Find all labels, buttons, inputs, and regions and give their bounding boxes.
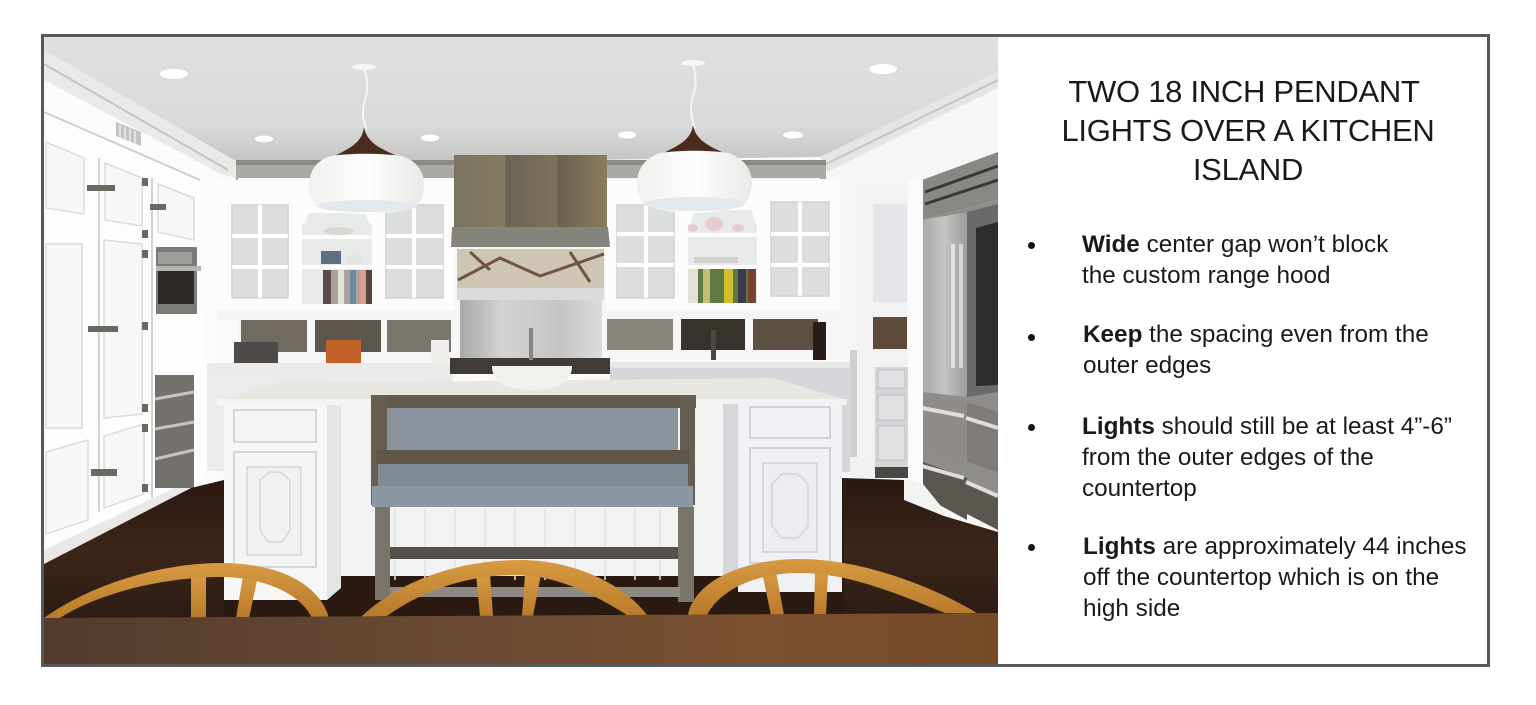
bullet: 44 inches off countertop: Lights are approximately 44 inches — [1083, 533, 1467, 560]
right pendant light — [637, 60, 752, 213]
bowl — [492, 366, 572, 390]
bullet: wide center gap: the custom range hood — [1082, 262, 1331, 289]
title — [1061, 74, 1435, 187]
bullet: keep spacing even: outer edges — [1083, 352, 1211, 379]
bullet: 44 inches off countertop — [1083, 533, 1467, 622]
dining table — [44, 613, 998, 664]
kitchen photo — [44, 37, 998, 664]
refrigerator — [904, 152, 998, 530]
bullet: outer edges clearance — [1082, 413, 1452, 502]
backsplash mirrors and counter — [207, 310, 878, 480]
dining chairs — [44, 559, 977, 618]
doorway — [857, 185, 908, 478]
bullet dot 3 — [1028, 424, 1035, 431]
range hood — [450, 155, 610, 374]
dark wood floor right — [842, 478, 998, 620]
dark wood floor left — [44, 480, 224, 620]
bullet: outer edges clearance: countertop — [1082, 475, 1197, 502]
kitchen island — [217, 328, 847, 620]
walls and ceiling — [44, 37, 998, 664]
left wall cabinets — [44, 80, 217, 564]
bullet: 44 inches off countertop: off the countertop which is on the — [1083, 564, 1439, 591]
right cookbooks — [688, 269, 756, 303]
title: ISLAND — [1193, 152, 1303, 187]
bullet dot 4 — [1028, 544, 1035, 551]
title: LIGHTS OVER A KITCHEN — [1061, 113, 1435, 148]
bullet: 44 inches off countertop: high side — [1083, 595, 1180, 622]
title: TWO 18 INCH PENDANT — [1068, 74, 1420, 109]
recessed ceiling lights — [160, 64, 897, 142]
bullet: keep spacing even — [1083, 321, 1429, 379]
bullet: wide center gap: Wide center gap won’t block — [1082, 231, 1388, 258]
left cookbooks — [323, 270, 372, 304]
back upper cabinets — [217, 179, 840, 310]
bullet dot 2 — [1028, 334, 1035, 341]
bullet: keep spacing even: Keep the spacing even from the — [1083, 321, 1429, 348]
bench — [371, 395, 696, 602]
left pendant light — [309, 64, 424, 214]
bullet dot 1 — [1028, 242, 1035, 249]
bullet: wide center gap — [1082, 231, 1388, 289]
bullet: outer edges clearance: Lights should still be at least 4”-6” — [1082, 413, 1452, 440]
bullet: outer edges clearance: from the outer edges of the — [1082, 444, 1374, 471]
